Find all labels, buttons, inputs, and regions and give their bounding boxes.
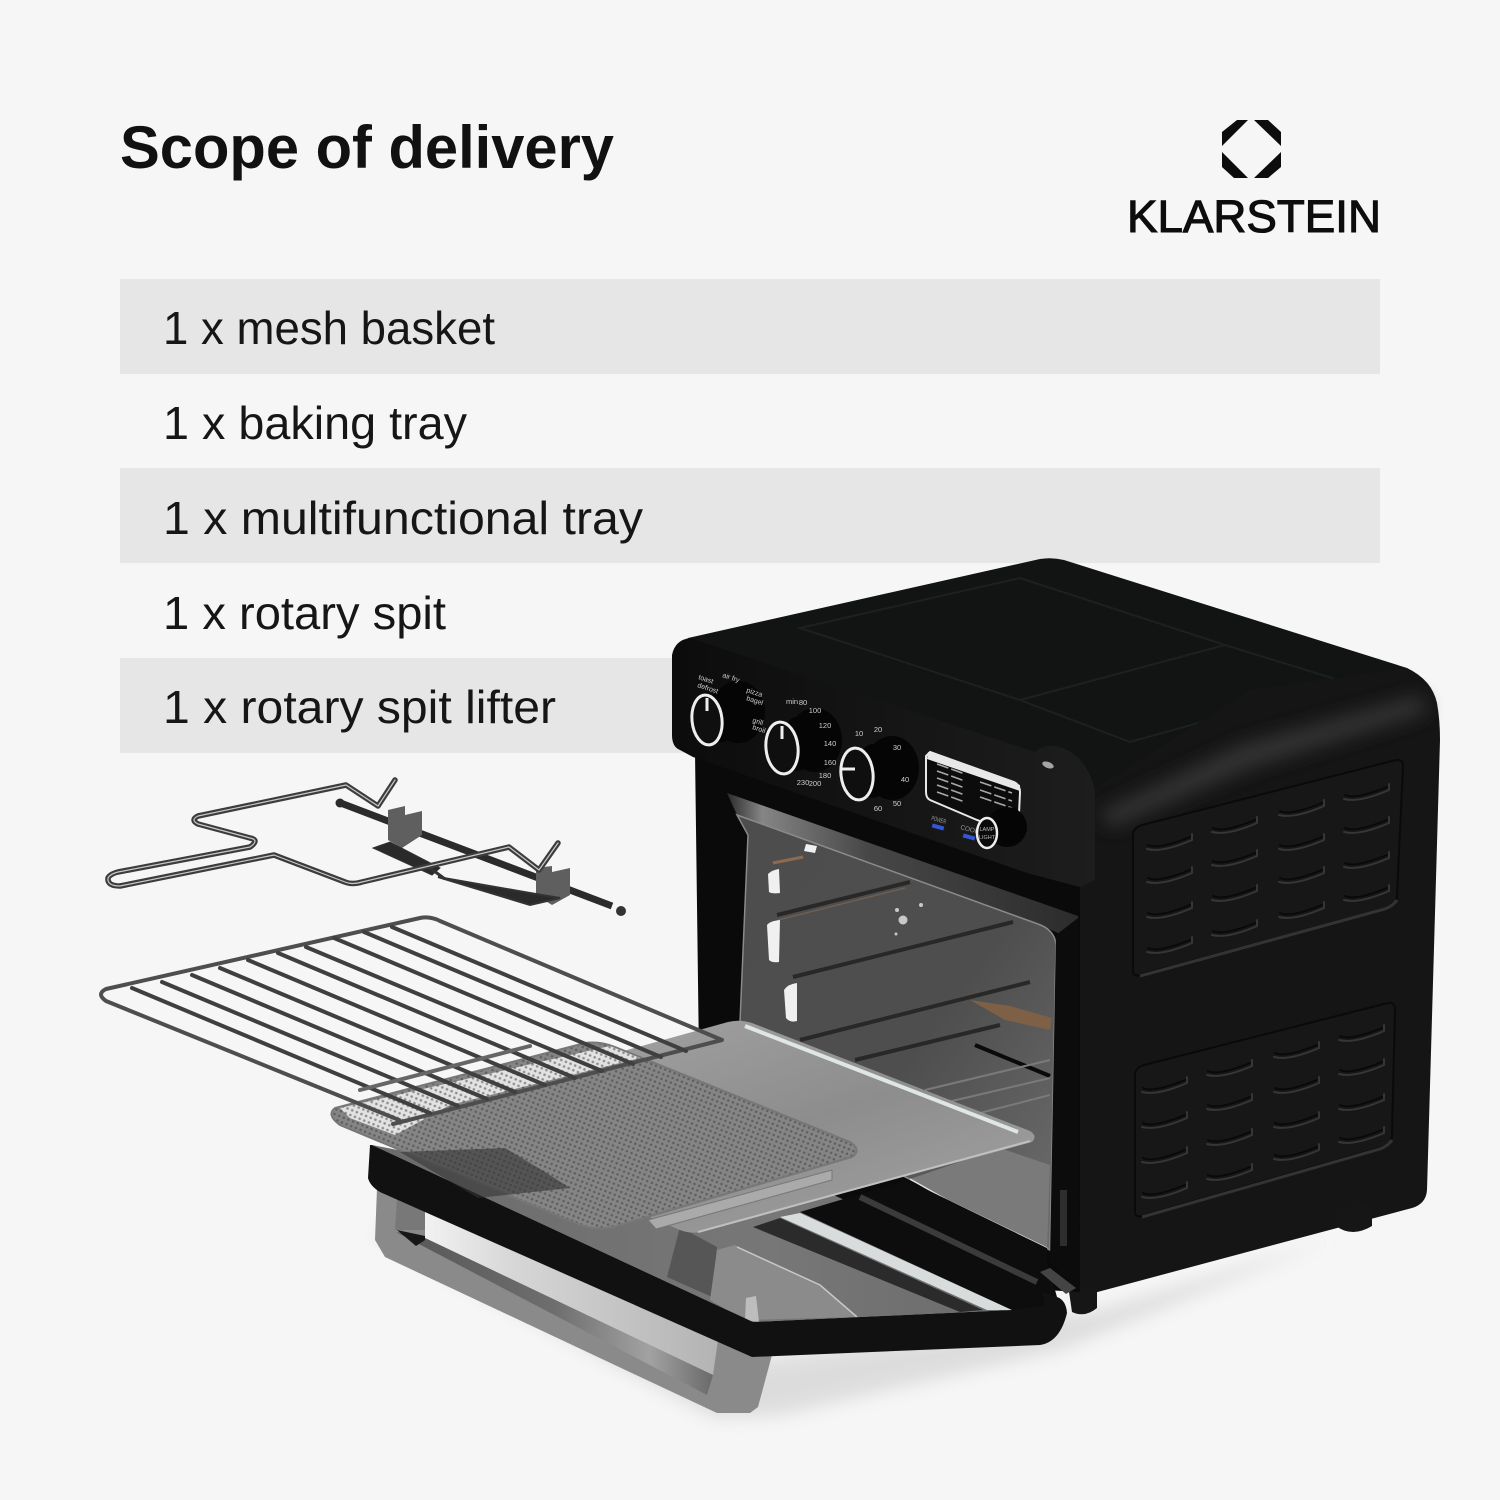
- door hinge: [1040, 1268, 1076, 1294]
- dial: temperature: 200: [809, 779, 821, 788]
- dial: temperature: 230: [797, 778, 809, 787]
- door handle: [375, 1188, 772, 1413]
- oven interior racks and reflections: [767, 844, 1052, 1122]
- spit fork: right: [438, 866, 570, 905]
- door glass: [372, 1145, 1040, 1322]
- oven top: [680, 558, 1437, 800]
- oven door: [372, 1145, 1040, 1413]
- basket lip: [648, 1170, 832, 1229]
- vent group: upper: [1133, 760, 1403, 976]
- rotary spit lifter: [108, 780, 558, 886]
- basket bright mesh strip: [340, 1046, 640, 1135]
- row: multifunctional tray: 1 x multifunctional tray: [163, 492, 643, 544]
- dark stripe: [753, 1218, 983, 1312]
- dial: temperature: [763, 697, 842, 788]
- spit rod: [336, 798, 626, 916]
- oven top panels: [800, 578, 1345, 742]
- title: Scope of delivery: [120, 114, 615, 181]
- basket mesh shadow: [400, 1148, 570, 1198]
- row: mesh basket: 1 x mesh basket: [163, 302, 495, 354]
- dial: function: toast: [697, 674, 714, 686]
- dial: function: air fry: [721, 672, 741, 684]
- handle opening: [425, 1205, 725, 1375]
- dial: lamp light: LAMP: [980, 827, 995, 833]
- dial: temperature: 80: [799, 698, 807, 707]
- row: rotary spit: 1 x rotary spit: [163, 587, 446, 639]
- dial: timer: 40: [901, 775, 909, 784]
- dial: function: pizza: [745, 687, 763, 699]
- dial: temperature: 120: [819, 721, 831, 730]
- dial: function: broil: [751, 724, 767, 735]
- door hinge bar: [1050, 918, 1080, 1292]
- rack cross wires: [132, 927, 686, 1113]
- row: mesh basket: [120, 279, 1380, 374]
- dial: timer: [838, 725, 919, 813]
- baking tray: [420, 1021, 1035, 1233]
- spit fork: left: [373, 806, 445, 879]
- dial: timer: 50: [893, 799, 901, 808]
- rack rear rail: [360, 1046, 530, 1090]
- multifunctional mesh basket: [331, 1042, 857, 1229]
- row: rotary spit lifter: 1 x rotary spit lifter: [163, 681, 556, 733]
- oven body: [672, 558, 1440, 1314]
- settings label plate: [926, 752, 1020, 835]
- wire rack: [101, 917, 722, 1124]
- side highlight: [1100, 695, 1428, 828]
- dial: temperature: 100: [809, 706, 821, 715]
- row: multifunctional tray: [120, 468, 1380, 563]
- floor shadow: [375, 1210, 1330, 1418]
- rack frame: [101, 917, 722, 1124]
- panel corner highlight: [1041, 760, 1055, 770]
- dial: lamp light: [977, 807, 1027, 848]
- row: baking tray: 1 x baking tray: [163, 397, 467, 449]
- panel face: [672, 638, 1095, 887]
- door glass reflection: bracket: [667, 1227, 857, 1322]
- dial: temperature: 180: [819, 771, 831, 780]
- dial: timer: 30: [893, 743, 901, 752]
- rear tray reflection in window: [910, 1148, 1050, 1248]
- dial: temperature: min: [786, 697, 798, 706]
- logo: Klarstein: [1127, 120, 1381, 242]
- indicator: power: POWER: [930, 815, 947, 826]
- indicator: cooking: COOKING: [959, 824, 991, 839]
- dial: function: bagel: [745, 695, 764, 707]
- oven feet: [1068, 1205, 1372, 1314]
- oven window glass: [737, 815, 1056, 1250]
- dial: lamp light: LIGHT: [979, 835, 996, 841]
- dial: function: defrost: [696, 682, 719, 696]
- dial: function: [689, 672, 767, 746]
- white reflection stripe: [780, 1213, 1012, 1310]
- rotary spit: [336, 798, 626, 916]
- gray gasket stripe: [860, 1197, 1037, 1282]
- oven right side: [1062, 668, 1440, 1294]
- dial: timer: 20: [874, 725, 882, 734]
- row: rotary spit lifter: [120, 658, 1380, 753]
- dial: temperature: 140: [824, 739, 836, 748]
- black inner band: [800, 1180, 1057, 1310]
- dial: temperature: 160: [824, 758, 836, 767]
- vent group: lower: [1135, 1003, 1395, 1217]
- door frame: [368, 1145, 1067, 1357]
- door top band: [727, 793, 1078, 945]
- dial: function: grill: [751, 717, 764, 727]
- indicator: power: [930, 815, 947, 830]
- list: delivery contents: [120, 279, 1380, 753]
- oven front frame: [695, 752, 1080, 1292]
- dial: timer: 10: [855, 729, 863, 738]
- dial: timer: 60: [874, 804, 882, 813]
- logo wordmark: KLARSTEIN: [1127, 191, 1381, 242]
- control panel: [672, 638, 1095, 887]
- inner door bands: [753, 1180, 1076, 1312]
- logo mark: [1222, 120, 1281, 178]
